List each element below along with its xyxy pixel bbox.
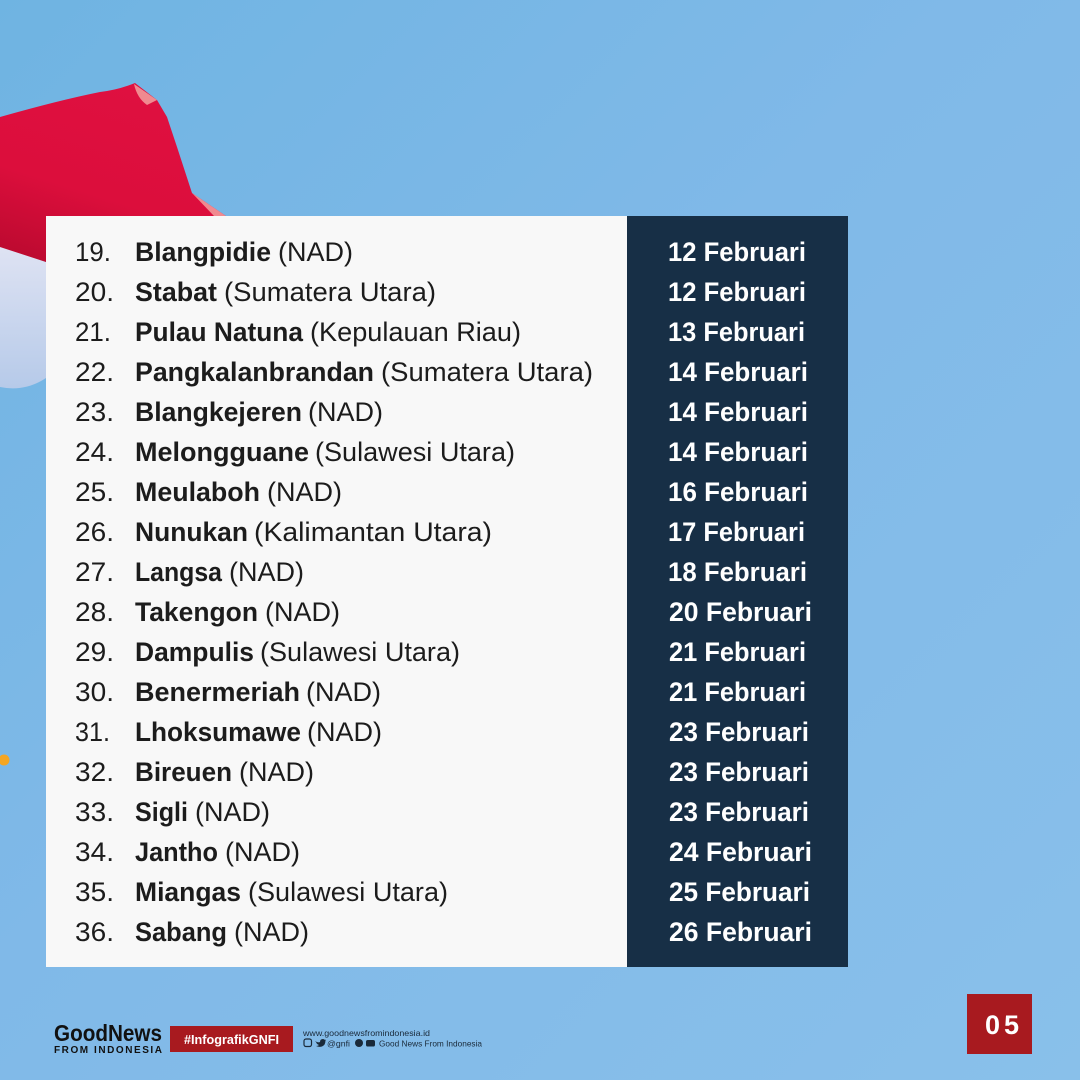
city list text: 33. [75, 797, 114, 827]
dates text: 26 Februari [669, 917, 812, 947]
city list text: (Sulawesi Utara) [260, 637, 460, 667]
flag [0, 83, 226, 388]
hashtag badge: #InfografikGNFI [184, 1033, 279, 1047]
dates text: 20 Februari [669, 597, 812, 627]
panel: city list [46, 216, 627, 967]
page number [967, 994, 1032, 1054]
dates text: 14 Februari [668, 357, 808, 387]
website and social handles: @gnfi [327, 1038, 350, 1048]
city list text: Takengon [135, 597, 258, 627]
icon: youtube [366, 1040, 375, 1046]
city list text: 20. [75, 277, 114, 307]
page number: 05 [985, 1010, 1019, 1040]
dates text: 12 Februari [668, 277, 806, 307]
city list text: Langsa [135, 557, 223, 587]
city list text: Benermeriah [135, 677, 300, 707]
city list text [75, 237, 593, 947]
city list text: Blangpidie [135, 237, 271, 267]
city list text: 25. [75, 477, 114, 507]
city list text: Pulau Natuna [135, 317, 304, 347]
logo: GoodNews From Indonesia: FROM INDONESIA [54, 1045, 162, 1056]
website and social handles: Good News From Indonesia [379, 1038, 482, 1048]
city list text: 36. [75, 917, 114, 947]
city list text: (Kalimantan Utara) [254, 517, 492, 547]
city list text: Miangas [135, 877, 241, 907]
city list text: (Sumatera Utara) [224, 277, 436, 307]
dates text: 13 Februari [668, 317, 805, 347]
dates text: 23 Februari [669, 717, 809, 747]
dates text: 18 Februari [668, 557, 807, 587]
city list text: 35. [75, 877, 114, 907]
city list text: (NAD) [306, 677, 381, 707]
city list text: Lhoksumawe [135, 717, 301, 747]
city list text: 24. [75, 437, 114, 467]
city list text: (NAD) [265, 597, 340, 627]
dates text [668, 237, 812, 947]
website and social handles [302, 1028, 482, 1048]
dates text: 14 Februari [668, 437, 808, 467]
city list text: (Sulawesi Utara) [315, 437, 515, 467]
city list text: 19. [75, 237, 111, 267]
city list text: (NAD) [267, 477, 342, 507]
city list text: 31. [75, 717, 110, 747]
city list text: Sigli [135, 797, 188, 827]
city list text: Nunukan [135, 517, 248, 547]
city list text: (NAD) [229, 557, 304, 587]
icon: instagram [304, 1039, 312, 1046]
dates text: 23 Februari [669, 757, 809, 787]
dates text: 14 Februari [668, 397, 808, 427]
dates text: 24 Februari [669, 837, 812, 867]
icon: facebook [355, 1039, 363, 1047]
hashtag badge [170, 1026, 293, 1052]
city list text: (NAD) [234, 917, 309, 947]
website and social handles: www.goodnewsfromindonesia.id [302, 1028, 430, 1038]
logo: GoodNews From Indonesia: GoodNews [54, 1020, 162, 1046]
city list text: 34. [75, 837, 114, 867]
city list text: 30. [75, 677, 114, 707]
dates text: 16 Februari [668, 477, 808, 507]
city list text: Bireuen [135, 757, 232, 787]
dates text: 25 Februari [669, 877, 810, 907]
city list text: 23. [75, 397, 114, 427]
city list text: 32. [75, 757, 114, 787]
city list text: Meulaboh [135, 477, 260, 507]
city list text: (Sumatera Utara) [381, 357, 593, 387]
city list text: Dampulis [135, 637, 254, 667]
city list text: (NAD) [308, 397, 383, 427]
dates text: 21 Februari [669, 677, 806, 707]
city list text: Blangkejeren [135, 397, 302, 427]
decorative dot [0, 754, 10, 766]
city list text: (NAD) [307, 717, 382, 747]
city list text: 29. [75, 637, 114, 667]
dates text: 23 Februari [669, 797, 809, 827]
city list text: Pangkalanbrandan [135, 357, 374, 387]
city list text: (Kepulauan Riau) [310, 317, 521, 347]
city list text: Melongguane [135, 437, 309, 467]
dates text: 21 Februari [669, 637, 806, 667]
city list text: 28. [75, 597, 114, 627]
city list text: Sabang [135, 917, 227, 947]
logo: GoodNews From Indonesia [54, 1020, 162, 1056]
city list text: (NAD) [225, 837, 300, 867]
city list text: Stabat [135, 277, 217, 307]
city list text: 26. [75, 517, 114, 547]
city list text: (NAD) [195, 797, 270, 827]
city list text: (NAD) [278, 237, 353, 267]
city list text: Jantho [135, 837, 218, 867]
city list text: (NAD) [239, 757, 314, 787]
panel: dates [627, 216, 848, 967]
city list text: (Sulawesi Utara) [248, 877, 448, 907]
city list text: 21. [75, 317, 111, 347]
dates text: 12 Februari [668, 237, 806, 267]
city list text: 27. [75, 557, 114, 587]
icon: twitter [315, 1039, 326, 1047]
dates text: 17 Februari [668, 517, 805, 547]
city list text: 22. [75, 357, 114, 387]
